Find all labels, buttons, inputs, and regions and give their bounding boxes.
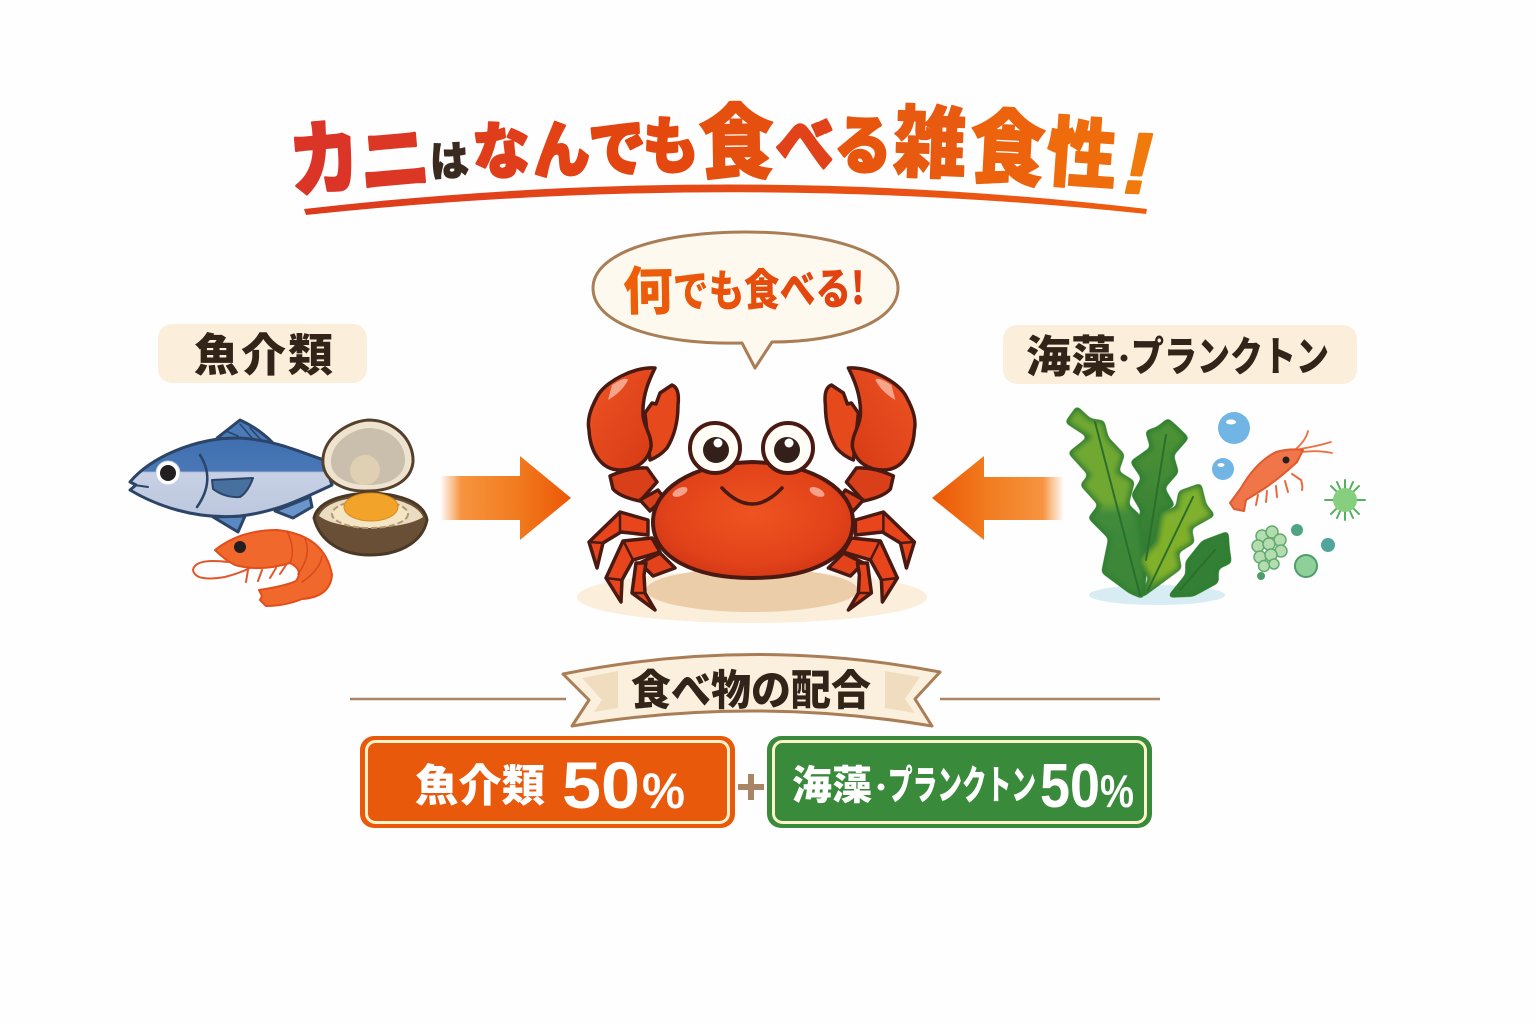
fish eye bbox=[156, 461, 180, 485]
title: ニ bbox=[354, 97, 434, 211]
title: も bbox=[642, 96, 699, 186]
title: 食 bbox=[967, 81, 1049, 204]
title bbox=[284, 77, 1154, 216]
ribbon heading bbox=[563, 654, 940, 726]
title: 性 bbox=[1044, 91, 1121, 206]
title: カ bbox=[284, 91, 364, 216]
stat box: seafood 50% bbox=[360, 736, 735, 828]
speech bubble text: でも食べる! bbox=[672, 253, 865, 320]
stat box: seaweed and plankton 50%: プランクトン bbox=[888, 753, 1036, 811]
crab mouth bbox=[722, 488, 782, 504]
stat box: seaweed and plankton 50%: % bbox=[1100, 765, 1134, 817]
stat box: seafood 50%: 魚介類 bbox=[415, 750, 545, 814]
stat box: seaweed and plankton 50% bbox=[767, 736, 1152, 828]
title: ん bbox=[530, 100, 591, 192]
arrow: seaweed to crab bbox=[932, 456, 1064, 540]
icon: clam bbox=[314, 420, 427, 555]
heading: seaweed and plankton label: 海藻 bbox=[1026, 321, 1116, 385]
speech bubble bbox=[593, 232, 898, 368]
icon: plankton bbox=[1252, 480, 1365, 580]
plus sign bbox=[738, 774, 764, 800]
title: 食 bbox=[698, 77, 775, 197]
title: 雑 bbox=[892, 80, 968, 195]
seaweed middle frond bbox=[1130, 420, 1187, 562]
title: な bbox=[470, 100, 533, 194]
icon: seaweed bbox=[1067, 408, 1230, 605]
crab left side limbs bbox=[588, 368, 678, 610]
title: で bbox=[587, 99, 647, 191]
arrow: seafood to crab bbox=[440, 456, 571, 540]
heading: seafood label bbox=[158, 319, 367, 384]
title: る bbox=[832, 92, 895, 188]
sand shadow bbox=[577, 568, 927, 623]
crab bbox=[577, 368, 927, 623]
crab body bbox=[653, 462, 853, 578]
title underline bbox=[304, 184, 1147, 215]
icon: shrimp bbox=[193, 530, 332, 606]
heading: seaweed and plankton label: プランクトン bbox=[1131, 323, 1329, 383]
title: は bbox=[428, 126, 470, 189]
crab eyes bbox=[690, 423, 813, 473]
icon: bubbles bbox=[1212, 412, 1250, 480]
seaweed left frond bbox=[1067, 408, 1145, 597]
icon: fish bbox=[130, 420, 332, 532]
speech bubble text: 何 bbox=[622, 249, 674, 325]
section divider lines bbox=[350, 698, 1160, 700]
heading: seaweed and plankton label bbox=[1003, 321, 1357, 385]
icon: small shrimp bbox=[1230, 431, 1332, 511]
stat box: seaweed and plankton 50%: 50 bbox=[1040, 752, 1100, 821]
stat box: seafood 50%: % bbox=[642, 763, 685, 819]
crab right side limbs bbox=[825, 368, 915, 610]
ribbon heading: 食べ物の配合 bbox=[631, 657, 871, 718]
stat box: seafood 50%: 50 bbox=[562, 748, 640, 822]
crab body highlights bbox=[671, 485, 826, 499]
speech bubble text bbox=[622, 246, 866, 325]
seaweed right frond bbox=[1140, 485, 1213, 596]
seaweed small frond bbox=[1170, 533, 1230, 596]
stat box: seaweed and plankton 50%: 海藻 bbox=[792, 753, 872, 811]
title: ! bbox=[1122, 116, 1154, 212]
title: べ bbox=[775, 91, 835, 187]
heading: seafood label: 魚介類 bbox=[194, 319, 333, 384]
